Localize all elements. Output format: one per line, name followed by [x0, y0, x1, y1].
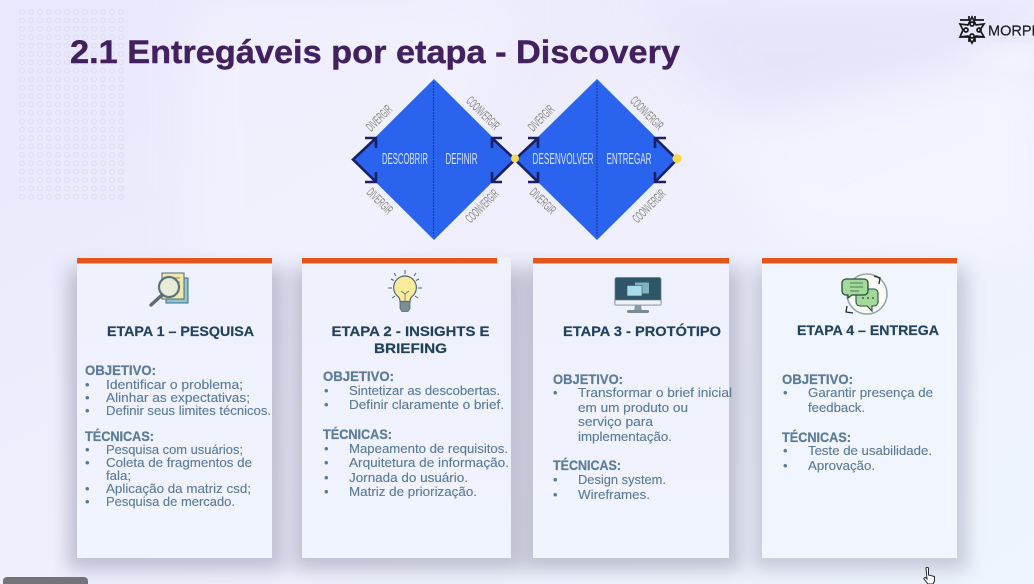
- objetivo: serviço para: [578, 414, 654, 429]
- tecnicas: •: [85, 481, 90, 496]
- diamond 1: [353, 79, 515, 240]
- diverge and converge labels: COONVERGIR: [462, 186, 502, 226]
- tecnicas: Pesquisa de mercado.: [106, 494, 235, 509]
- phase labels: ENTREGAR: [606, 151, 652, 168]
- diverge and converge labels: DIVERGIR: [525, 102, 557, 134]
- icon: magnifier over documents: [151, 273, 188, 305]
- tecnicas: Arquitetura de informação.: [349, 455, 509, 470]
- tecnicas: Aprovação.: [808, 458, 875, 473]
- objetivo: em um produto ou: [578, 400, 688, 415]
- tecnicas: •: [783, 443, 788, 458]
- phase labels: [382, 151, 652, 168]
- divider lines: [434, 82, 597, 236]
- tecnicas: [323, 427, 509, 499]
- diverge and converge labels: DIVERGIR: [364, 185, 396, 217]
- diverge and converge labels: [363, 93, 669, 226]
- heading: ETAPA 1 – PESQUISA: [107, 323, 254, 339]
- tecnicas: TÉCNICAS:: [553, 458, 621, 473]
- icon: monitor: [615, 278, 661, 313]
- heading: ETAPA 4 – ENTREGA: [797, 322, 939, 338]
- panel: etapa 4: [753, 258, 967, 570]
- tecnicas: Jornada do usuário.: [349, 470, 468, 485]
- tecnicas: •: [553, 472, 558, 487]
- tecnicas: •: [85, 494, 90, 509]
- tecnicas: •: [783, 458, 788, 473]
- tecnicas: TÉCNICAS:: [85, 429, 154, 444]
- objetivo: Garantir presença de: [808, 385, 933, 400]
- diverge and converge labels: COONVERGIR: [463, 93, 503, 133]
- diamond 2: [515, 79, 678, 240]
- objetivo: [553, 372, 732, 444]
- diverge and converge labels: COONVERGIR: [629, 186, 669, 226]
- tecnicas: Pesquisa com usuários;: [106, 442, 243, 457]
- objetivo: [782, 372, 933, 415]
- tecnicas: •: [324, 484, 329, 499]
- tecnicas: TÉCNICAS:: [323, 427, 392, 442]
- heading: ETAPA 2 - INSIGHTS E: [332, 323, 490, 339]
- objetivo: feedback.: [808, 400, 865, 415]
- panel: etapa 2: [293, 258, 523, 570]
- objetivo: •: [85, 390, 90, 405]
- tecnicas: Matriz de priorização.: [349, 484, 477, 499]
- objetivo: Definir claramente o brief.: [349, 397, 504, 412]
- objetivo: Definir seus limites técnicos.: [106, 403, 271, 418]
- tecnicas: TÉCNICAS:: [782, 430, 851, 445]
- objetivo: Transformar o brief inicial: [578, 385, 732, 400]
- dot pattern: [18, 8, 126, 201]
- tecnicas: Teste de usabilidade.: [808, 443, 932, 458]
- objetivo: •: [85, 403, 90, 418]
- tecnicas: •: [85, 455, 90, 470]
- tecnicas: Coleta de fragmentos de: [106, 455, 252, 470]
- objetivo: implementação.: [578, 429, 672, 444]
- objetivo: OBJETIVO:: [85, 363, 156, 378]
- heading: [332, 323, 490, 356]
- objetivo: •: [553, 385, 558, 400]
- tecnicas: •: [324, 470, 329, 485]
- objetivo: Identificar o problema;: [106, 377, 243, 392]
- objetivo: •: [783, 385, 788, 400]
- objetivo: •: [324, 383, 329, 398]
- icon: light bulb: [388, 270, 422, 312]
- tecnicas: Aplicação da matriz csd;: [106, 481, 251, 496]
- heading: BRIEFING: [374, 340, 447, 356]
- tecnicas: •: [324, 441, 329, 456]
- phase labels: DESENVOLVER: [532, 151, 594, 168]
- phase labels: DESCOBRIR: [382, 151, 428, 168]
- tecnicas: Wireframes.: [578, 487, 650, 502]
- tecnicas: [782, 430, 932, 473]
- tecnicas: [553, 458, 666, 502]
- diverge and converge labels: COONVERGIR: [627, 93, 667, 133]
- icon: hand cursor: [924, 567, 934, 584]
- objetivo: •: [324, 397, 329, 412]
- tecnicas: [85, 429, 252, 509]
- tecnicas: •: [324, 455, 329, 470]
- tecnicas: fala;: [106, 468, 131, 483]
- tecnicas: Design system.: [578, 472, 666, 487]
- objetivo: OBJETIVO:: [553, 372, 623, 387]
- tecnicas: •: [85, 442, 90, 457]
- objetivo: •: [85, 377, 90, 392]
- objetivo: Alinhar as expectativas;: [106, 390, 250, 405]
- objetivo: Sintetizar as descobertas.: [349, 383, 500, 398]
- bottom-left window tab: [3, 577, 88, 584]
- double diamond diagram: [353, 79, 682, 240]
- objetivo: OBJETIVO:: [323, 369, 394, 384]
- icon: chat bubbles: [842, 274, 887, 314]
- logo: Morph: [960, 16, 1034, 43]
- diverge and converge labels: DIVERGIR: [527, 185, 559, 217]
- tecnicas: Mapeamento de requisitos.: [349, 441, 508, 456]
- title: 2.1 Entregáveis por etapa - Discovery: [70, 34, 680, 70]
- objetivo: [85, 363, 271, 418]
- yellow nodes: [511, 154, 682, 163]
- phase labels: DEFINIR: [446, 151, 478, 168]
- arrows: [353, 138, 677, 182]
- heading: ETAPA 3 - PROTÓTIPO: [563, 322, 721, 339]
- tecnicas: •: [553, 487, 558, 502]
- objetivo: OBJETIVO:: [782, 372, 853, 387]
- panel: etapa 3: [524, 258, 741, 570]
- objetivo: [323, 369, 504, 412]
- panel: etapa 1: [68, 258, 284, 570]
- diverge and converge labels: DIVERGIR: [363, 102, 395, 134]
